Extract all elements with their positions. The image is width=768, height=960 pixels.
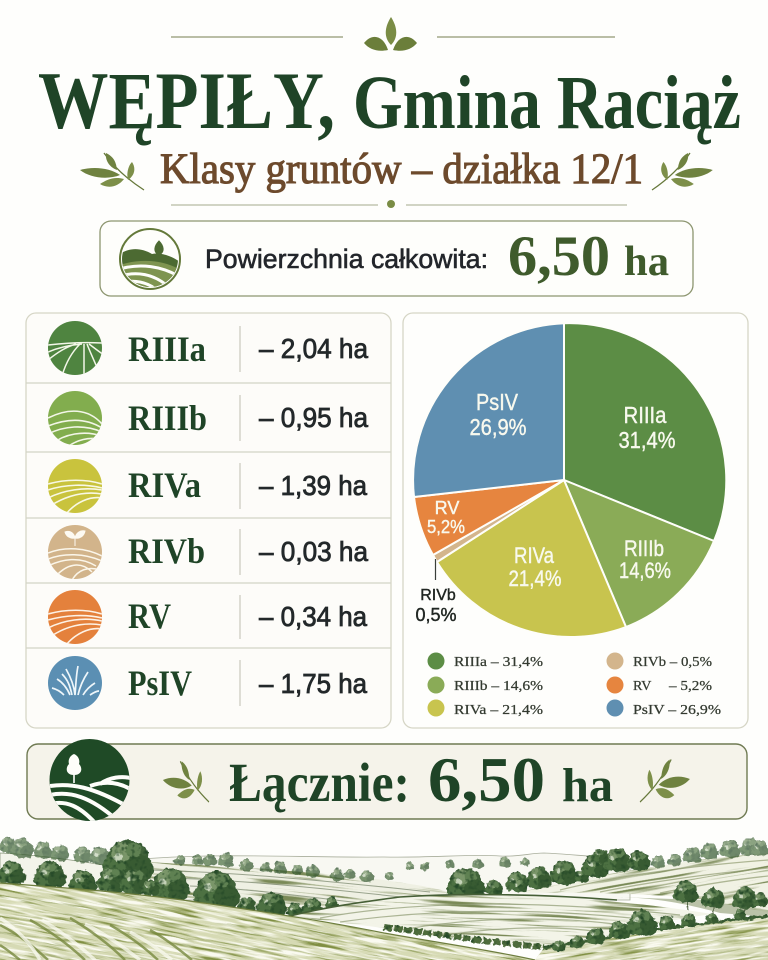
- area value: 6,50: [508, 225, 610, 288]
- pie labels: 21,4%: [508, 566, 562, 591]
- pie chart: [413, 323, 726, 637]
- panel: total area: [100, 221, 693, 296]
- shrub line: [384, 916, 768, 948]
- panel: grand total: [27, 739, 747, 824]
- total value: Łącznie:: [229, 752, 410, 813]
- total value: [229, 745, 613, 815]
- pie labels: PsIV: [476, 389, 519, 415]
- trees: far row: [0, 837, 768, 882]
- row: PsIV: – 1,75 ha: [259, 668, 367, 699]
- row: RIVa: – 1,39 ha: [259, 470, 367, 501]
- row: RIIIb: – 0,95 ha: [259, 402, 368, 433]
- trees: treeline: [0, 840, 650, 918]
- row: RIVa: [48, 459, 367, 514]
- pie labels: 14,6%: [619, 558, 671, 583]
- title: [38, 55, 741, 146]
- row: PsIV: PsIV: [128, 663, 192, 703]
- legend: PsIV – 26,9%: [633, 703, 721, 718]
- legend: RIIIa – 31,4%: [454, 655, 543, 670]
- top ornament: [171, 17, 615, 51]
- illustration: rolling fields landscape: [0, 837, 768, 960]
- row: RIIIa: – 2,04 ha: [259, 333, 368, 364]
- trees: foreground and lone trees: [552, 881, 768, 952]
- row: RIIIb: RIIIb: [128, 398, 207, 438]
- row: RIVb: [48, 525, 368, 580]
- far ridge: [130, 853, 630, 900]
- pie labels: 5,2%: [427, 517, 465, 537]
- foreground wheat: [0, 880, 540, 960]
- legend: [428, 652, 721, 718]
- total value: ha: [562, 759, 613, 812]
- icon: left sprig: [163, 761, 209, 802]
- total value: 6,50: [428, 745, 545, 815]
- row: RIVb: RIVb: [128, 531, 205, 571]
- pie labels: RIVa: [514, 543, 555, 568]
- row: PsIV: [48, 656, 367, 710]
- pie labels: [427, 389, 676, 591]
- pie labels: 31,4%: [618, 427, 676, 453]
- callout: RIVb: RIVb: [420, 587, 456, 604]
- row: RIVa: RIVa: [128, 465, 201, 505]
- legend: RIVa – 21,4%: [454, 703, 543, 718]
- row: RV: RV: [128, 596, 171, 636]
- right foreground: [535, 917, 768, 960]
- area value: [508, 225, 669, 288]
- mid left field: [148, 862, 448, 914]
- pie labels: RIIIb: [624, 536, 664, 561]
- middle field: [293, 895, 710, 948]
- callout: RIVb: 0,5%: [415, 605, 457, 625]
- pie labels: RV: [435, 498, 459, 518]
- icon: right sprig: [652, 153, 713, 190]
- row: RIIIa: RIIIa: [128, 329, 206, 369]
- legend: RIVb – 0,5%: [633, 655, 712, 670]
- legend: RV: [633, 679, 651, 694]
- pie labels: RIIIa: [624, 402, 667, 428]
- panel: land class list: [26, 313, 391, 728]
- subtitle: Klasy gruntów – działka 12/1: [160, 146, 643, 193]
- row: RV: [48, 590, 367, 645]
- row: RV: – 0,34 ha: [259, 601, 367, 632]
- left back field: [0, 853, 130, 890]
- icon: left sprig: [80, 153, 144, 190]
- subtitle divider: [171, 200, 627, 208]
- row: RIIIa: [48, 321, 368, 376]
- icon: tree emblem: [50, 739, 130, 824]
- callout: RIVb: [415, 559, 457, 625]
- panel: pie chart: [403, 313, 748, 728]
- row: RIVb: – 0,03 ha: [259, 536, 368, 567]
- area label: Powierzchnia całkowita:: [205, 244, 488, 274]
- legend: – 5,2%: [668, 679, 712, 694]
- icon: landscape emblem: [120, 229, 180, 291]
- pie labels: 26,9%: [470, 414, 526, 440]
- title: WĘPIŁY,: [38, 55, 335, 146]
- right back field: [519, 854, 768, 912]
- icon: right sprig: [640, 759, 690, 802]
- area value: ha: [624, 239, 669, 285]
- legend: RIIIb – 14,6%: [454, 679, 543, 694]
- row: RIIIb: [48, 391, 368, 448]
